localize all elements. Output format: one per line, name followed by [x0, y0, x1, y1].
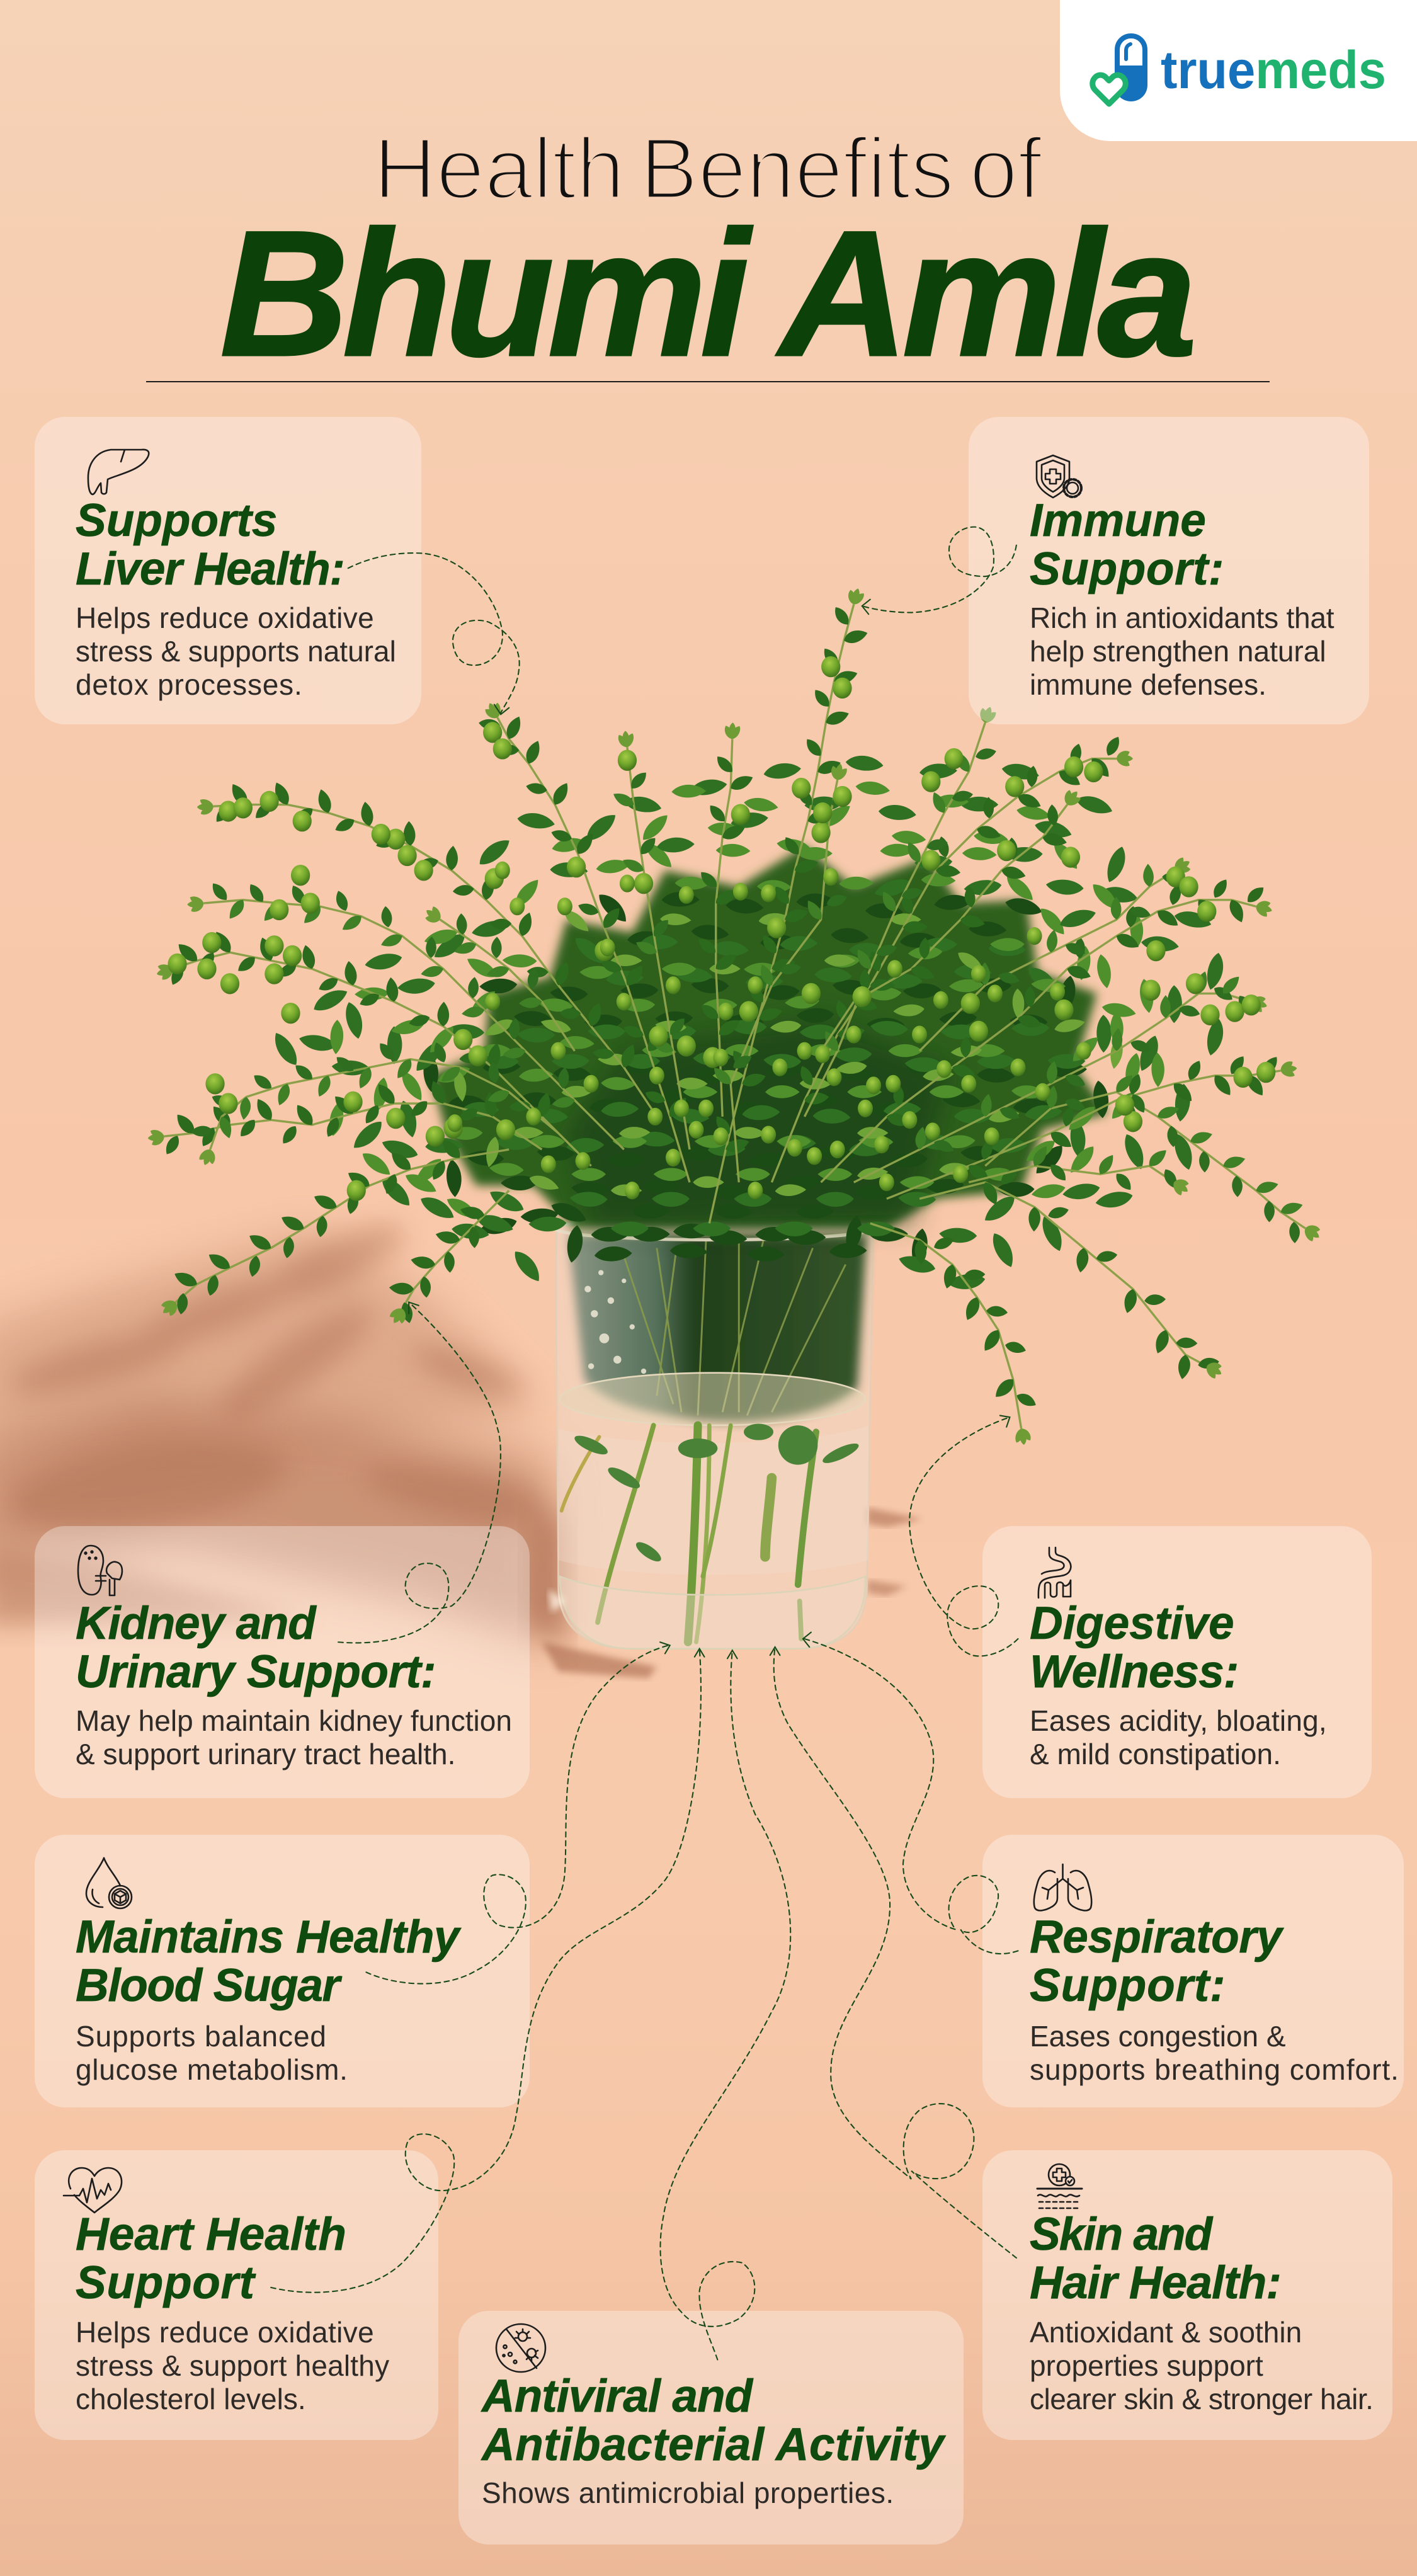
title rule [146, 381, 1270, 382]
logo panel [1060, 0, 1417, 141]
core berries [455, 870, 1084, 1190]
description: supports breathing comfort. [1030, 2053, 1399, 2086]
glass vase with water and stems [549, 1217, 874, 1649]
description: help strengthen natural [1030, 635, 1326, 668]
title line: Health Benefits of: Health Benefits of [373, 120, 1042, 217]
berries [178, 667, 1266, 1190]
panel: kidney and urinary support [35, 1526, 530, 1798]
connector: blood sugar [366, 1642, 670, 1984]
description [1030, 601, 1334, 701]
heading: Digestive [1030, 1598, 1234, 1649]
heading: Maintains Healthy [76, 1912, 459, 1963]
heading: Hair Health: [1030, 2257, 1281, 2308]
heading: Skin and [1030, 2209, 1211, 2260]
icon: lungs [1033, 1863, 1092, 1912]
heading [482, 2372, 944, 2469]
icon: virus crossed out [495, 2323, 547, 2373]
description: properties support [1030, 2349, 1263, 2382]
description: clearer skin & stronger hair. [1030, 2383, 1373, 2415]
icon: liver [87, 448, 150, 495]
description: Antioxidant & soothin [1030, 2316, 1302, 2349]
description [1030, 2316, 1373, 2416]
heading: Respiratory [1030, 1912, 1282, 1963]
title line: Bhumi Amla: Bhumi Amla [220, 194, 1190, 394]
connector: respiratory [803, 1633, 1018, 1954]
heading: Heart Health [76, 2209, 346, 2260]
panel: skin and hair health [982, 2150, 1392, 2440]
icon: heart with pulse [63, 2167, 122, 2213]
icon: skin layers [1037, 2162, 1083, 2210]
left branches [164, 604, 1306, 1428]
icon: shield [1035, 455, 1083, 499]
foliage leaves side fill [336, 789, 1158, 1207]
description: & support urinary tract health. [76, 1738, 455, 1770]
heading: Support [76, 2257, 255, 2308]
connector: digestive [909, 1415, 1018, 1656]
description: Shows antimicrobial properties. [482, 2476, 894, 2509]
panel: antiviral and antibacterial activity [458, 2311, 964, 2545]
heading: Urinary Support: [76, 1646, 436, 1697]
heading: Supports [76, 495, 277, 546]
description: Rich in antioxidants that [1030, 601, 1334, 634]
heading [1030, 1598, 1238, 1697]
icon: kidney [77, 1544, 123, 1596]
description: Eases congestion & [1030, 2020, 1286, 2053]
description: & mild constipation. [1030, 1738, 1281, 1770]
heading: Liver Health: [76, 544, 344, 595]
description: detox processes. [76, 668, 303, 701]
description [76, 2316, 389, 2416]
foliage leaves layer light [411, 851, 1133, 1182]
panel: digestive wellness [982, 1526, 1372, 1798]
foliage core mass [430, 846, 1108, 1228]
plant: foliage, branches and berries [164, 604, 1306, 1428]
description: immune defenses. [1030, 668, 1266, 701]
heading [1030, 1912, 1285, 2011]
heading [76, 2209, 346, 2308]
description [76, 1704, 512, 1770]
heading: Antibacterial Activity [482, 2419, 944, 2470]
description: Eases acidity, bloating, [1030, 1704, 1327, 1737]
description: stress & supports natural [76, 635, 396, 668]
heading: Kidney and [76, 1598, 315, 1649]
foliage leaves upper halo [287, 763, 1215, 1281]
heading: Wellness: [1030, 1646, 1238, 1697]
heading [76, 495, 344, 595]
description: Helps reduce oxidative [76, 601, 374, 634]
description: cholesterol levels. [76, 2383, 306, 2415]
panel: immune support [969, 417, 1369, 724]
description: glucose metabolism. [76, 2053, 348, 2086]
panel: heart health support [35, 2150, 438, 2440]
right branches [709, 604, 854, 1223]
panel: liver health [35, 417, 421, 724]
cast foliage shadow [0, 1211, 923, 1678]
description: May help maintain kidney function [76, 1704, 512, 1737]
connector: immune [862, 527, 1016, 614]
connector: heart [271, 1649, 704, 2293]
heading [1030, 2210, 1281, 2307]
foliage leaves layer mid [407, 943, 1103, 1235]
heading: Antiviral and [482, 2371, 752, 2422]
description: stress & support healthy [76, 2349, 389, 2382]
description [1030, 1704, 1327, 1770]
truemeds logo [1090, 33, 1386, 107]
heading: Support: [1030, 544, 1224, 595]
description: Helps reduce oxidative [76, 2316, 374, 2349]
heading [76, 1598, 436, 1697]
connector: kidney [338, 1302, 501, 1643]
truemeds logo: truemeds [1161, 40, 1386, 100]
heading: Blood Sugar [76, 1960, 339, 2011]
heading [1030, 495, 1224, 595]
heading [76, 1912, 462, 2011]
dark lower foliage [566, 1018, 952, 1228]
connector: skin [770, 1647, 1016, 2258]
description [76, 601, 396, 701]
connector: antiviral [660, 1650, 790, 2360]
foliage leaves layer dark [430, 900, 1100, 1255]
connector: liver [348, 553, 520, 714]
heading: Immune [1030, 495, 1206, 546]
foliage leaves bright highlights [460, 920, 1117, 1190]
description: Supports balanced [76, 2020, 327, 2053]
icon: blood drop with cube [86, 1857, 132, 1910]
description [1030, 2020, 1399, 2086]
panel: healthy blood sugar [35, 1835, 530, 2107]
heading: Support: [1030, 1960, 1226, 2011]
description [76, 2020, 348, 2086]
icon: stomach and intestine [1038, 1547, 1072, 1599]
panel: respiratory support [982, 1835, 1404, 2107]
